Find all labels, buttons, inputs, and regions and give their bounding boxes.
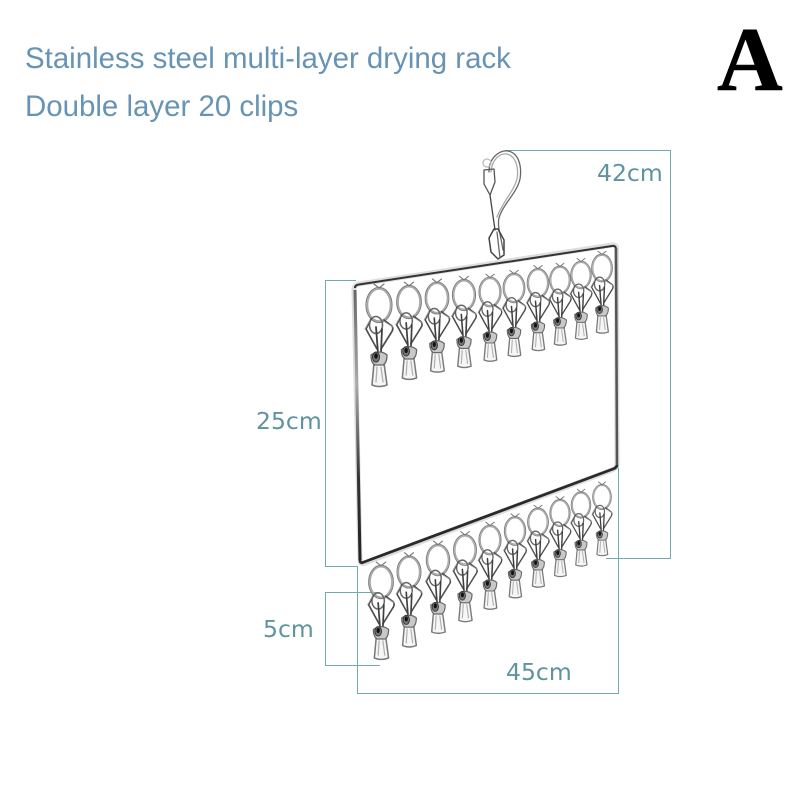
hook — [483, 151, 521, 259]
dimension: 5cm clip height: 5cm — [263, 615, 314, 643]
dimension: 42cm height — [505, 150, 670, 558]
rack frame — [354, 245, 617, 564]
bottom row of 10 clips — [368, 482, 612, 659]
dimension: 25cm frame height: 25cm — [256, 407, 322, 435]
dimension: 5cm clip height — [263, 592, 380, 666]
dimension: 45cm width: 45cm — [506, 658, 572, 686]
title: product name: Stainless steel multi-layer drying rack — [25, 42, 511, 75]
model letter A: A — [717, 9, 783, 110]
top row of 10 clips — [365, 251, 613, 386]
dimension: 42cm height: 42cm — [597, 159, 663, 187]
dimension: 45cm width — [358, 450, 618, 694]
dimension: 25cm frame height — [256, 280, 357, 566]
subtitle: clip count: Double layer 20 clips — [25, 90, 298, 123]
